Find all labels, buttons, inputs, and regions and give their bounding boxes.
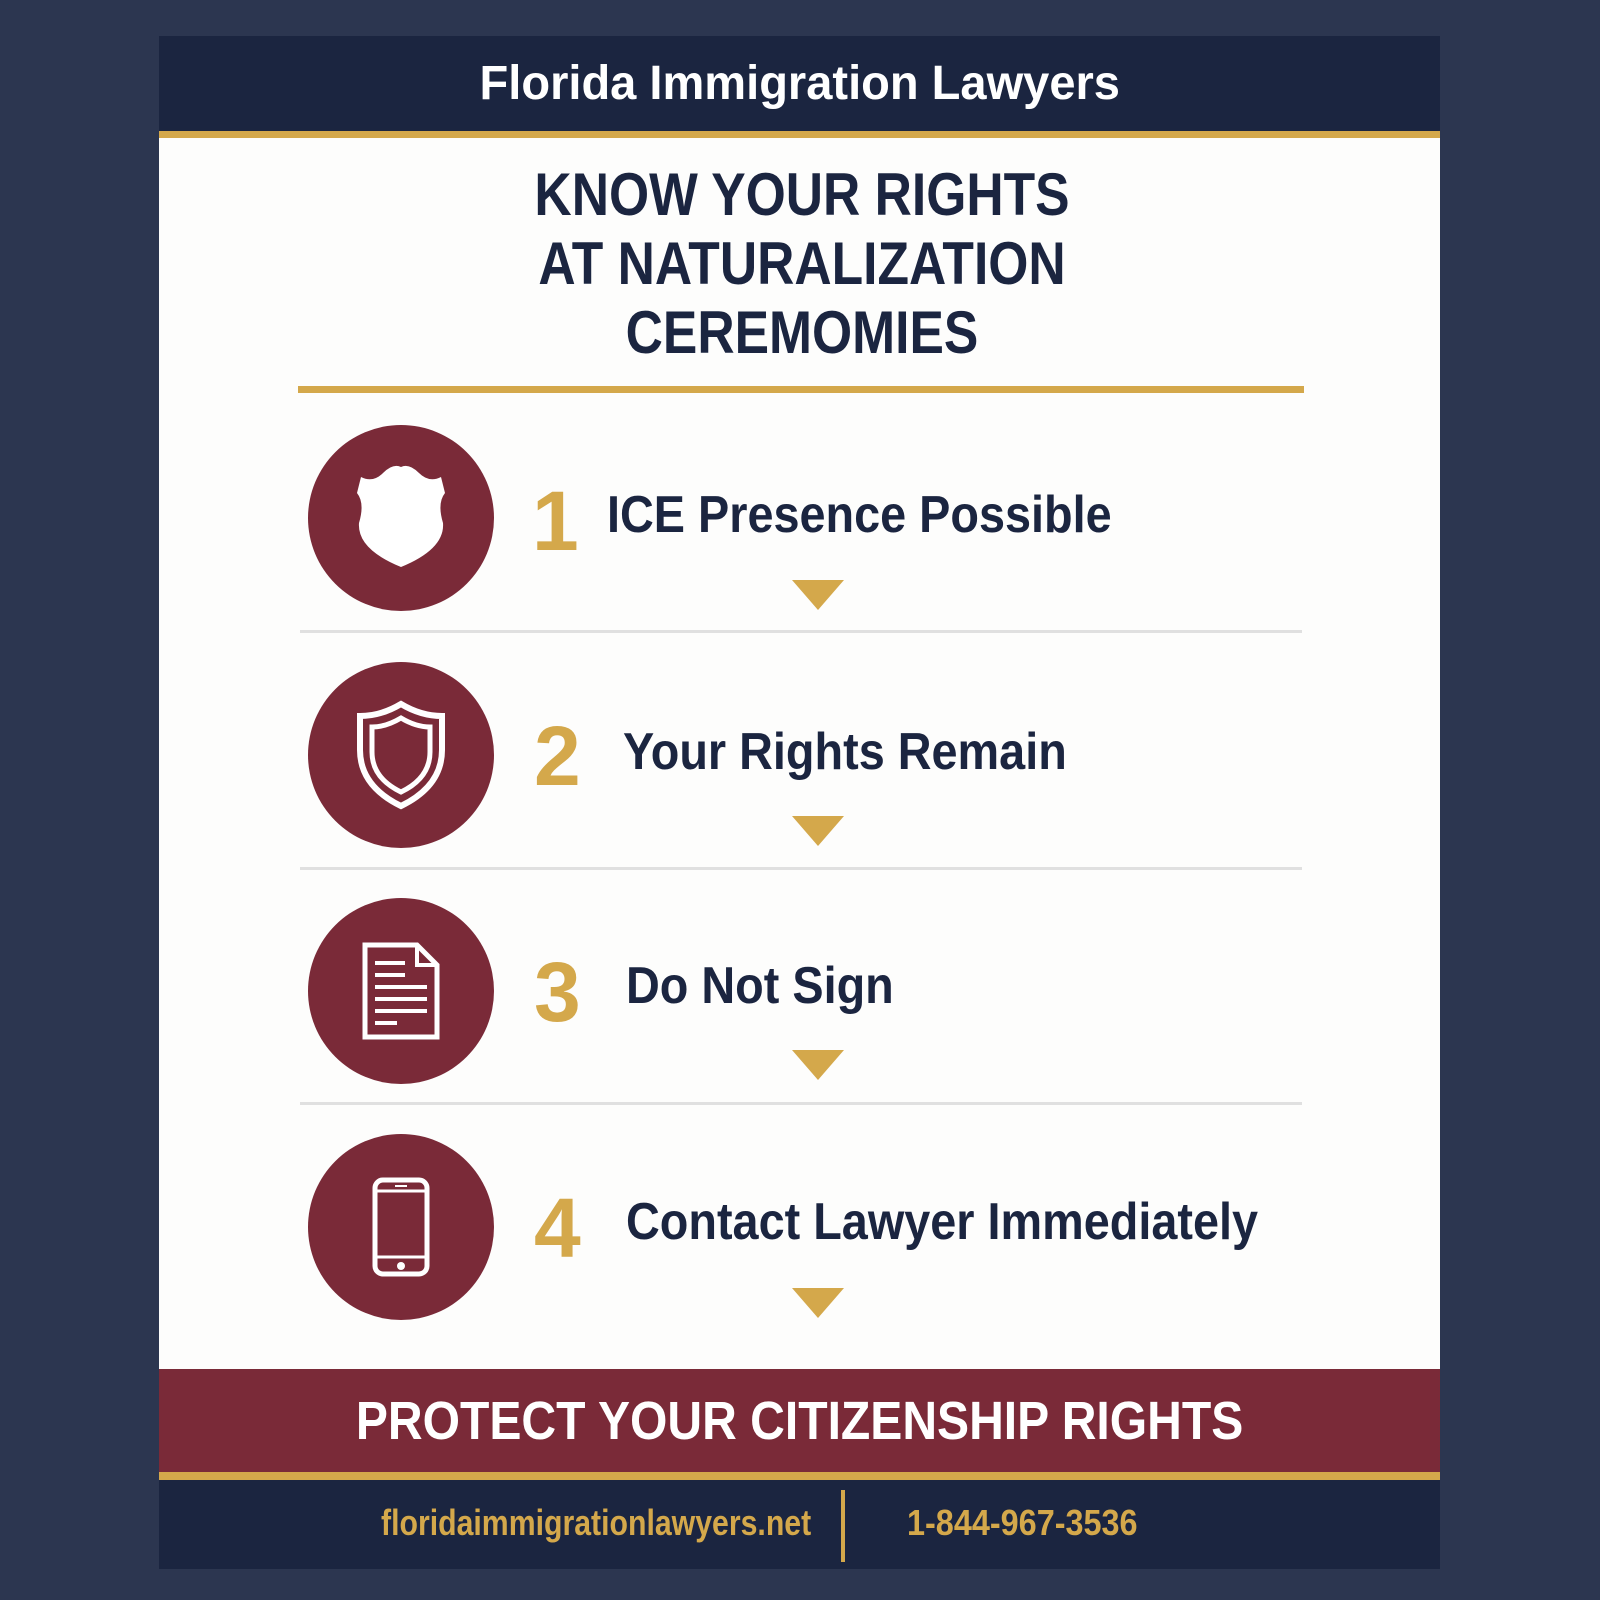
arrow bbox=[792, 580, 844, 610]
main title bbox=[534, 161, 1070, 366]
main title: AT NATURALIZATION bbox=[538, 230, 1066, 297]
main title: KNOW YOUR RIGHTS bbox=[534, 161, 1070, 228]
label: Do Not Sign bbox=[626, 957, 894, 1015]
website: floridaimmigrationlawyers.net bbox=[381, 1502, 811, 1543]
label: Your Rights Remain bbox=[623, 723, 1067, 781]
step 1 bbox=[308, 425, 1112, 611]
banner: PROTECT YOUR CITIZENSHIP RIGHTS bbox=[356, 1390, 1243, 1450]
number 2: 2 bbox=[534, 709, 581, 803]
step 3 bbox=[308, 898, 894, 1084]
header bar bbox=[159, 36, 1440, 131]
number 4: 4 bbox=[534, 1181, 581, 1275]
step 4 bbox=[308, 1134, 1258, 1320]
footer bbox=[159, 1480, 1440, 1569]
label: ICE Presence Possible bbox=[607, 486, 1112, 544]
arrow bbox=[792, 1288, 844, 1318]
icon: document bbox=[308, 898, 494, 1084]
banner bbox=[159, 1369, 1440, 1472]
arrow bbox=[792, 1050, 844, 1080]
icon: phone bbox=[308, 1134, 494, 1320]
main title: CEREMOMIES bbox=[626, 299, 978, 366]
arrow bbox=[792, 816, 844, 846]
phone: 1-844-967-3536 bbox=[907, 1502, 1138, 1543]
step 2 bbox=[308, 662, 1067, 848]
icon: badge bbox=[308, 425, 494, 611]
number 3: 3 bbox=[534, 945, 581, 1039]
number 1: 1 bbox=[532, 474, 579, 568]
label: Contact Lawyer Immediately bbox=[626, 1193, 1258, 1251]
header title: Florida Immigration Lawyers bbox=[479, 57, 1120, 110]
card bbox=[159, 36, 1440, 1569]
icon: shield bbox=[308, 662, 494, 848]
